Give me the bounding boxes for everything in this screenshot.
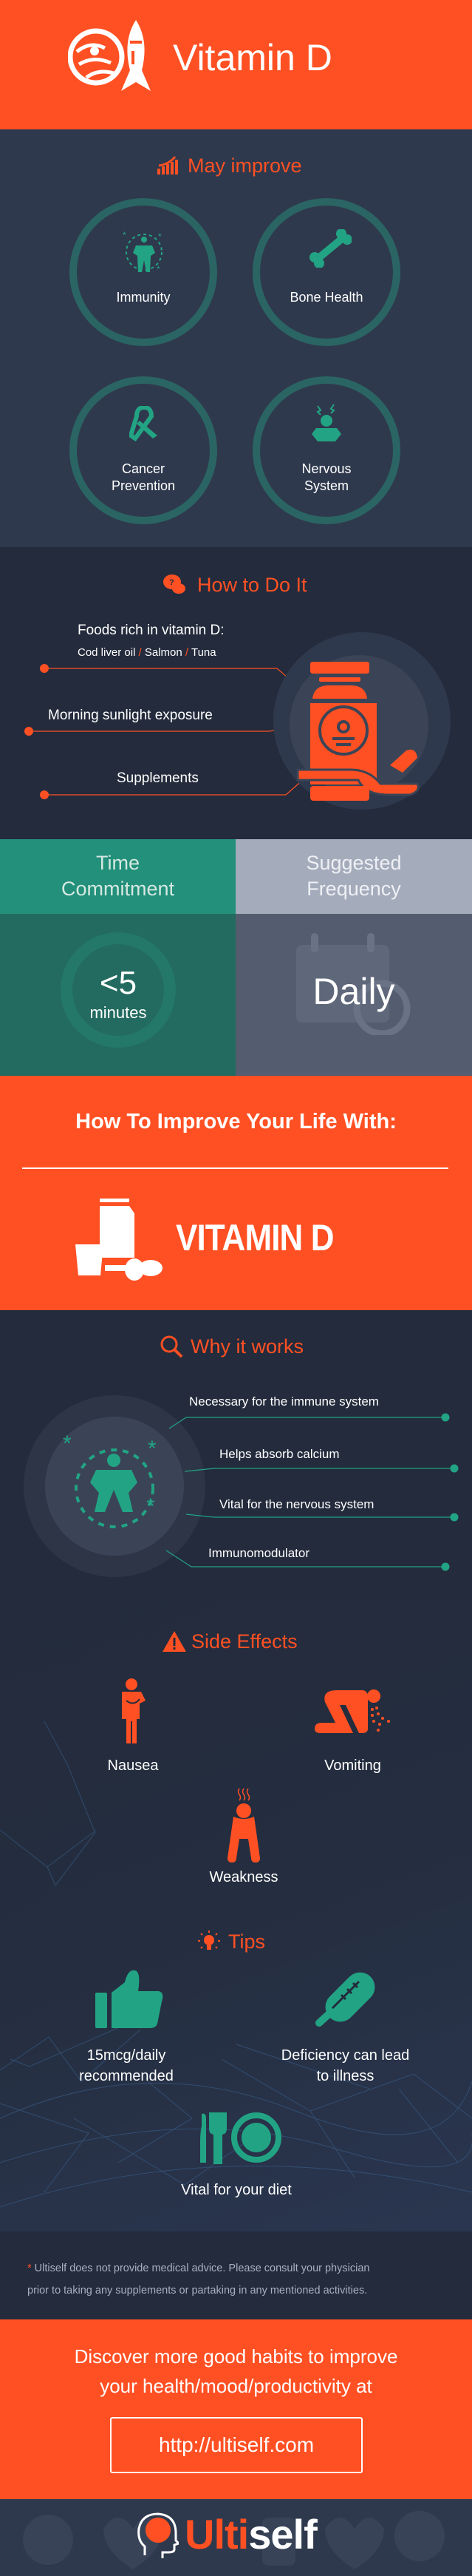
icon: speech bubbles: ? — [169, 578, 174, 587]
panel: why it works: Helps absorb calcium — [219, 1447, 340, 1461]
icon: fork knife plate — [200, 2112, 281, 2164]
item: bone health: Bone Health — [290, 290, 363, 305]
icon: chart — [157, 156, 178, 174]
header: suggested frequency: Frequency — [307, 878, 401, 900]
icon: magnifier — [161, 1335, 183, 1358]
icon: immune figure circle — [24, 1395, 205, 1577]
header: time commitment: Commitment — [61, 878, 174, 900]
panel: how to improve — [0, 1076, 472, 1310]
heading: How To Improve Your Life With: — [75, 1110, 397, 1133]
text: sunlight: Morning sunlight exposure — [48, 708, 213, 723]
icon: clock with value: <5 — [100, 965, 137, 1001]
cta text: your health/mood/productivity at — [100, 2375, 372, 2397]
title: Vitamin D — [173, 37, 332, 78]
panel: call to action — [0, 2319, 472, 2499]
icon: speech bubbles — [163, 574, 185, 594]
item: deficiency — [281, 1973, 409, 2084]
panel: may improve — [0, 129, 472, 547]
header: suggested frequency: Suggested — [306, 852, 402, 874]
item: nausea — [108, 1678, 158, 1774]
background network — [0, 1721, 472, 2208]
header: time commitment — [0, 839, 236, 914]
item: deficiency: Deficiency can lead — [281, 2047, 409, 2064]
text list: Necessary for the immune system — [189, 1394, 379, 1409]
item: vital for diet: Vital for your diet — [181, 2182, 292, 2198]
icon: milk and eggs — [75, 1199, 163, 1281]
icon: immune figure circle: * — [148, 1437, 157, 1461]
value: daily: Daily — [312, 971, 395, 1012]
item: nausea: Nausea — [108, 1758, 158, 1774]
text: foods: Foods rich in vitamin D: — [78, 623, 225, 638]
icon: nausea — [122, 1678, 146, 1743]
connector lines — [165, 1414, 458, 1570]
icon: clock with value — [61, 932, 176, 1048]
heading: Why it works — [191, 1335, 304, 1358]
item: nervous system: Nervous — [301, 461, 352, 476]
item: vital for diet — [181, 2112, 292, 2198]
disclaimer: prior to taking any supplements or partaking in any mentioned activities. — [27, 2285, 367, 2297]
url box: http://ultiself.com — [159, 2433, 314, 2456]
panel: why it works — [0, 1310, 472, 1601]
panel: how to do it — [0, 547, 472, 839]
heading: side effects: Side Effects — [191, 1630, 298, 1653]
icon: immune person — [123, 231, 163, 274]
panel: side effects and tips — [0, 1601, 472, 2231]
item: weakness — [209, 1788, 278, 1885]
item: 15mcg — [79, 1970, 174, 2084]
icon: weakness — [228, 1788, 260, 1862]
cta text: Discover more good habits to improve — [75, 2345, 397, 2367]
item: vomiting — [315, 1689, 390, 1774]
item: cancer prevention: Cancer — [122, 461, 165, 476]
footer — [0, 2499, 472, 2576]
header: time commitment: Time — [96, 852, 140, 874]
header — [0, 0, 472, 129]
text: ultiself: Ultiself — [185, 2511, 317, 2558]
item: nervous system: System — [304, 478, 349, 493]
item: 15mcg: 15mcg/daily — [87, 2047, 165, 2064]
item: weakness: Weakness — [209, 1869, 278, 1885]
icon: stressed person — [312, 404, 341, 441]
item: immunity: Immunity — [116, 290, 170, 305]
header: suggested frequency — [236, 839, 472, 914]
icon: ribbon — [129, 406, 157, 441]
title: vitamin d: VITAMIN D — [176, 1217, 334, 1258]
icon: immune figure circle: * — [146, 1494, 155, 1519]
item: 15mcg: recommended — [79, 2068, 174, 2084]
icon: thermometer — [315, 1973, 375, 2027]
panel: why it works: Vital for the nervous system — [219, 1497, 374, 1511]
heading: may improve: May improve — [188, 155, 302, 177]
item: bone health — [253, 198, 400, 346]
icon: bone — [309, 229, 352, 268]
item: cancer prevention — [69, 376, 217, 524]
item: nervous system — [253, 376, 400, 524]
panel: time commitment — [0, 839, 236, 1076]
icon: immune person: * — [158, 231, 162, 242]
icon: warning — [163, 1631, 186, 1652]
icon: clock with value: minutes — [89, 1003, 147, 1022]
icon: salmon and fish — [68, 20, 151, 91]
item: vomiting: Vomiting — [324, 1758, 381, 1774]
item: cancer prevention: Prevention — [112, 478, 175, 493]
icon: light bulb — [198, 1931, 220, 1950]
icon: brain head — [137, 2512, 179, 2558]
panel: suggested frequency — [236, 839, 472, 1076]
icon: calendar — [296, 933, 411, 1035]
heading: how to do it: How to Do It — [197, 574, 307, 596]
heading: tips: Tips — [228, 1931, 265, 1953]
icon: supplement jar — [273, 632, 451, 810]
heading: tips — [198, 1931, 265, 1953]
logo — [137, 2511, 318, 2558]
cta text — [75, 2345, 397, 2397]
icon: immune figure circle: * — [63, 1431, 72, 1456]
url box — [110, 2417, 363, 2473]
disclaimer — [0, 2231, 472, 2319]
disclaimer: * Ultiself does not provide medical advice. Please consult your physician — [27, 2263, 369, 2274]
icon: thumbs up — [95, 1970, 163, 2028]
text: supplements: Supplements — [117, 770, 199, 786]
background icons — [23, 2511, 445, 2569]
icon: vomiting — [315, 1689, 390, 1733]
panel: why it works: Immunomodulator — [208, 1546, 309, 1560]
panel: how to do it: Cod liver oil / Salmon / Tuna — [78, 646, 216, 659]
item: immunity — [69, 198, 217, 346]
connector lines — [24, 664, 300, 799]
item: deficiency: to illness — [317, 2068, 374, 2084]
